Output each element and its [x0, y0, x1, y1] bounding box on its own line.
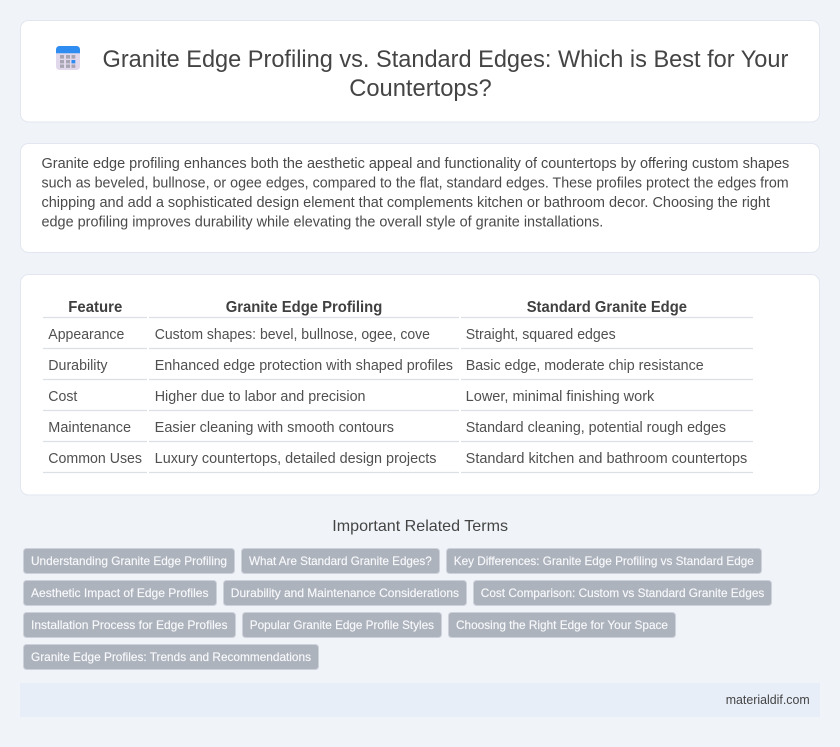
tag: Key Differences: Granite Edge Profiling vs Standard Edge: [454, 554, 754, 568]
tag: Granite Edge Profiles: Trends and Recommendations: [31, 650, 311, 664]
title: Granite Edge Profiling vs. Standard Edges: Which is Best for Your: [102, 46, 788, 73]
table header: Granite Edge Profiling: [226, 299, 382, 316]
heading: important related terms: Important Related Terms: [332, 518, 508, 535]
related term tags: [24, 548, 772, 670]
row: common uses: [48, 451, 747, 467]
text block: introduction: edge profiling improves durability while elevating the overall style of granite installations.: [42, 214, 603, 230]
tag: [474, 580, 772, 606]
text block: introduction: such as beveled, bullnose, or ogee edges, compared to the flat, standard edges. These profiles protect the edges from: [42, 175, 789, 191]
tag: Aesthetic Impact of Edge Profiles: [31, 586, 209, 600]
tag: [448, 612, 676, 638]
row: durability: Basic edge, moderate chip resistance: [466, 358, 704, 374]
row: cost: [48, 389, 655, 405]
text block: introduction: Granite edge profiling enhances both the aesthetic appeal and functionality of countertops by offering custom shapes: [42, 156, 789, 172]
tag: [24, 612, 236, 638]
row: common uses: Common Uses: [48, 451, 142, 467]
row: appearance: Straight, squared edges: [466, 327, 616, 343]
row: durability: Enhanced edge protection with shaped profiles: [155, 358, 453, 374]
row: appearance: [48, 327, 616, 343]
row: cost: Lower, minimal finishing work: [466, 389, 655, 405]
row: cost: Higher due to labor and precision: [155, 389, 366, 405]
row: common uses: Luxury countertops, detailed design projects: [155, 451, 436, 467]
row: appearance: Custom shapes: bevel, bullnose, ogee, cove: [155, 327, 430, 343]
row: maintenance: [48, 420, 726, 436]
row: cost: Cost: [48, 389, 77, 405]
row: common uses: Standard kitchen and bathroom countertops: [466, 451, 747, 467]
footer: [20, 683, 820, 717]
text block: introduction: chipping and add a sophisticated design element that complements kitchen or bathroom decor. Choosing the right: [42, 195, 770, 211]
tag: [242, 612, 442, 638]
tag: [24, 644, 318, 670]
table header: Standard Granite Edge: [527, 299, 687, 316]
panel: introduction: [20, 144, 820, 252]
row: durability: Durability: [48, 358, 108, 374]
text block: introduction: [42, 156, 789, 230]
tag: Installation Process for Edge Profiles: [31, 618, 228, 632]
row: appearance: Appearance: [48, 327, 124, 343]
tag: [446, 548, 762, 574]
tag: [224, 580, 466, 606]
icon: calendar: [56, 46, 80, 70]
tag: [242, 548, 440, 574]
footer: materialdif.com: [726, 692, 810, 707]
tag: What Are Standard Granite Edges?: [249, 554, 432, 568]
tag: [24, 580, 216, 606]
tag: Cost Comparison: Custom vs Standard Granite Edges: [481, 586, 764, 600]
tag: [24, 548, 234, 574]
table header: [68, 299, 687, 316]
tag: Durability and Maintenance Considerations: [231, 586, 459, 600]
row: maintenance: Maintenance: [48, 420, 131, 436]
row: maintenance: Easier cleaning with smooth contours: [155, 420, 394, 436]
row: durability: [48, 358, 704, 374]
tag: Choosing the Right Edge for Your Space: [456, 618, 668, 632]
title: [102, 46, 788, 102]
tag: Understanding Granite Edge Profiling: [31, 554, 227, 568]
tag: Popular Granite Edge Profile Styles: [250, 618, 434, 632]
row: maintenance: Standard cleaning, potential rough edges: [466, 420, 726, 436]
title: Countertops?: [349, 75, 492, 102]
panel: comparison table: [20, 274, 820, 495]
panel: header: [20, 20, 820, 122]
table header: Feature: [68, 299, 122, 316]
